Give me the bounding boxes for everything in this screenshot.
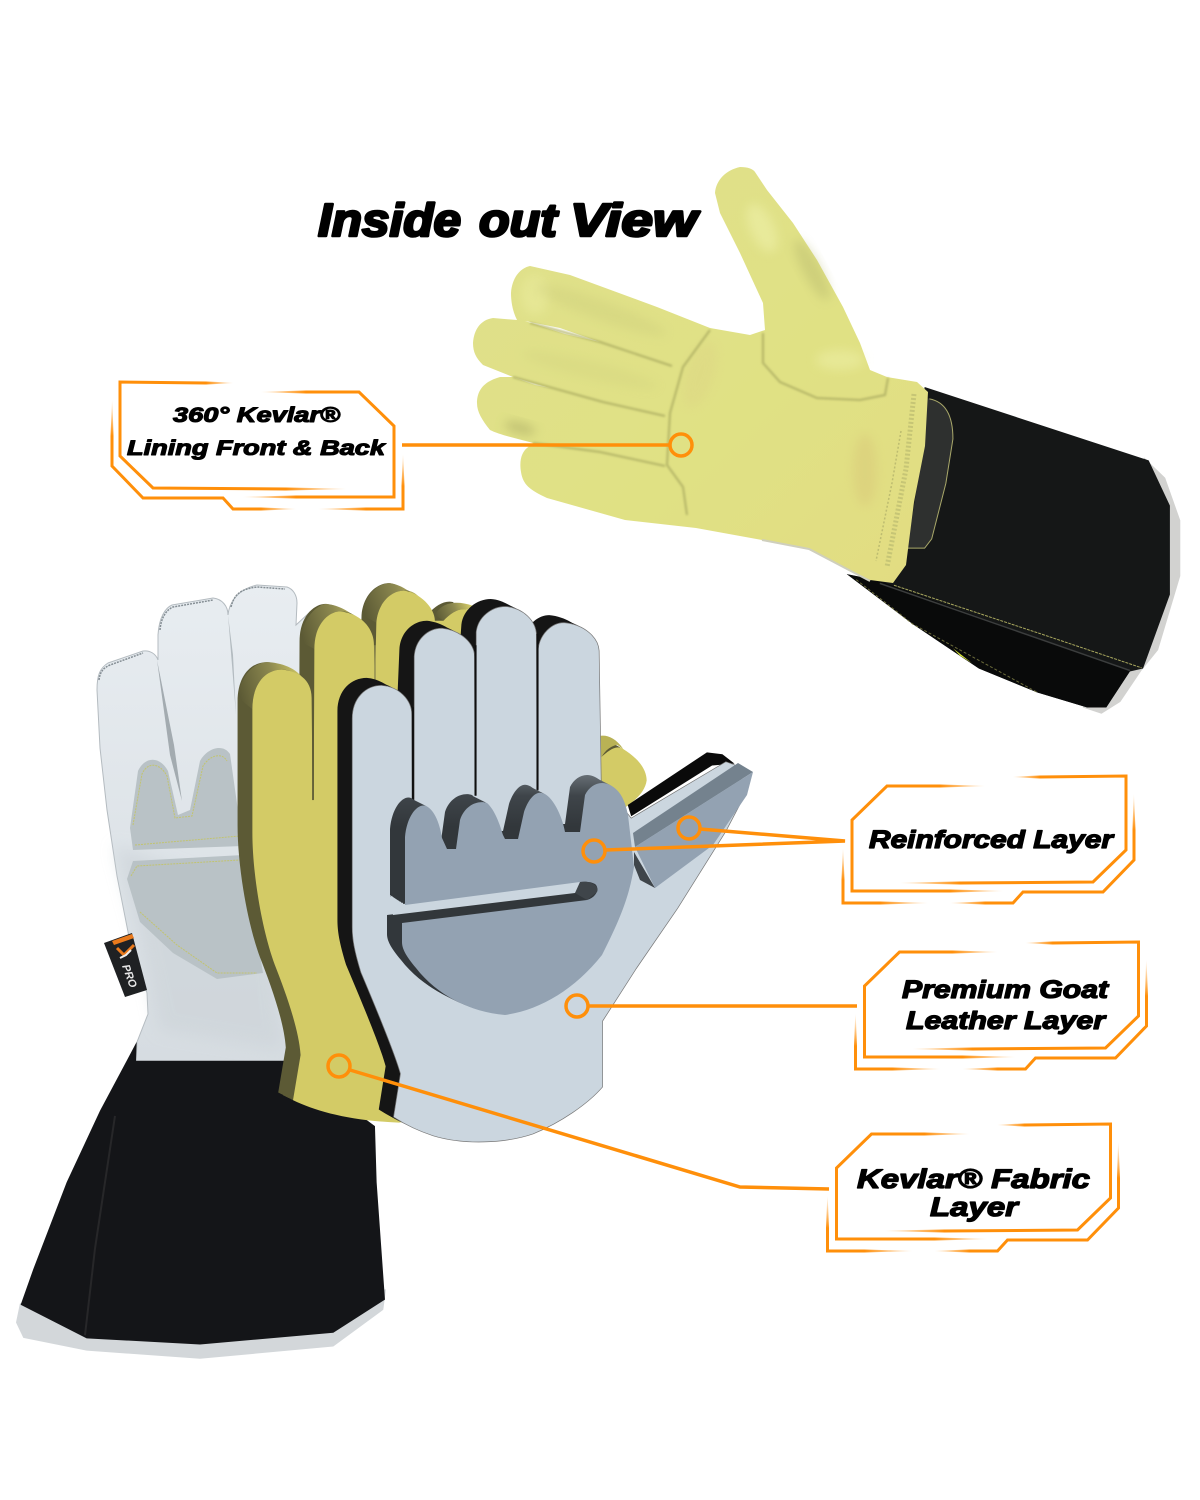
reinforced patch upper (130, 748, 243, 850)
reinforcement extruded edge (387, 775, 632, 1014)
stitched inner panel on gauntlet (907, 398, 953, 548)
leather body (97, 585, 340, 1062)
black gauntlet of kevlar glove (847, 387, 1180, 714)
callout line: lining (402, 434, 692, 456)
finger and palm creases (513, 323, 888, 515)
kevlar hand body (473, 167, 928, 583)
callout: Kevlar fabric layer: Layer (930, 1192, 1020, 1222)
cuff stitching (887, 394, 914, 567)
callout: Kevlar fabric layer (826, 1124, 1120, 1252)
callout: Kevlar fabric layer: Kevlar® Fabric (857, 1164, 1090, 1194)
reinforcement face (402, 783, 634, 1015)
callout: 360 Kevlar lining (110, 382, 404, 510)
leather glove photo: palm view (16, 585, 386, 1359)
callout: premium goat leather layer: Premium Goat (902, 976, 1110, 1004)
callout: premium goat leather layer: Leather Layer (906, 1007, 1107, 1035)
finger separators (413, 634, 538, 811)
black extruded edge (337, 599, 600, 1141)
brand tag on leather glove (104, 933, 147, 997)
layer: goat leather (337, 599, 747, 1142)
kevlar fabric shading (503, 199, 877, 506)
gauntlet lower fold (847, 574, 1130, 707)
kevlar glove photo: inside out view (473, 167, 1180, 714)
callout: 360 Kevlar lining: Lining Front & Back (127, 437, 387, 460)
callout: 360 Kevlar lining: 360° Kevlar® (173, 404, 341, 427)
lit finger tops (238, 662, 306, 709)
stitched fingertip edges (99, 587, 285, 680)
yellow face (252, 591, 647, 1123)
reinforced patch lower (127, 855, 263, 979)
brand tag on leather glove: PRO (119, 963, 139, 990)
gauntlet edge binding (1083, 457, 1180, 714)
black split-leather panel (847, 387, 1170, 707)
black split-leather panel (21, 1042, 385, 1344)
slot highlight (390, 882, 590, 915)
title: Inside (318, 194, 461, 246)
palm shade (115, 845, 283, 1050)
callout line: goat leather layer (566, 995, 857, 1017)
thumb reinforcement (633, 763, 753, 847)
finger slit (310, 696, 315, 800)
title: out (479, 194, 559, 246)
callout: premium goat leather layer (854, 942, 1148, 1070)
exploded layers illustration (238, 583, 753, 1142)
layer: reinforced palm (387, 763, 753, 1015)
extruded yellow edge (238, 583, 644, 1122)
finger gaps (157, 660, 182, 801)
black gauntlet of leather glove (16, 1042, 386, 1359)
gauntlet edge binding (16, 1289, 386, 1359)
title (318, 194, 701, 246)
title: View (570, 194, 701, 246)
layer: Kevlar fabric (238, 583, 647, 1123)
slot dark end (575, 882, 598, 900)
callout line: Kevlar fabric layer (328, 1055, 829, 1189)
callout: reinforced layer (842, 776, 1136, 904)
gaps between fingers (525, 321, 600, 342)
leather face (352, 606, 747, 1142)
callout: reinforced layer: Reinforced Layer (869, 826, 1115, 854)
callout line: reinforced layer (583, 817, 845, 862)
